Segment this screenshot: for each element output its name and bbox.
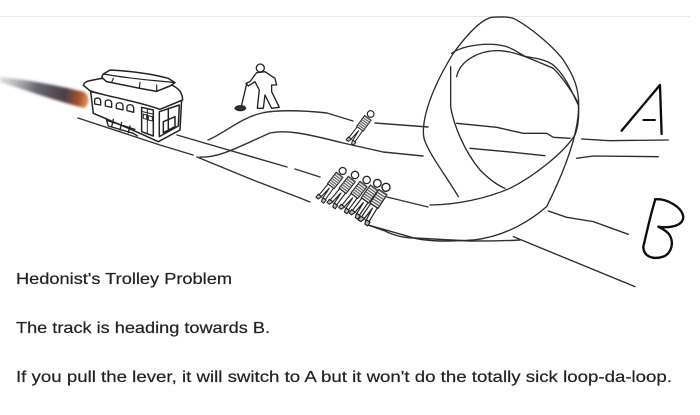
caption: track direction: The track is heading towards B. <box>16 320 270 337</box>
one person tied to track A <box>346 109 376 145</box>
lever <box>242 84 247 105</box>
label B <box>643 199 683 258</box>
rocket exhaust flame <box>0 77 88 108</box>
caption: lever consequence: If you pull the lever, it will switch to A but it won't do the totally sick loop-da-loop. <box>16 369 672 386</box>
left tracks <box>78 111 520 241</box>
label A <box>622 85 662 134</box>
caption: title: Hedonist's Trolley Problem <box>16 271 232 288</box>
person at the lever <box>235 64 279 111</box>
trolley <box>83 70 183 142</box>
loop-da-loop track <box>368 17 668 287</box>
five people tied to track B <box>316 165 393 226</box>
